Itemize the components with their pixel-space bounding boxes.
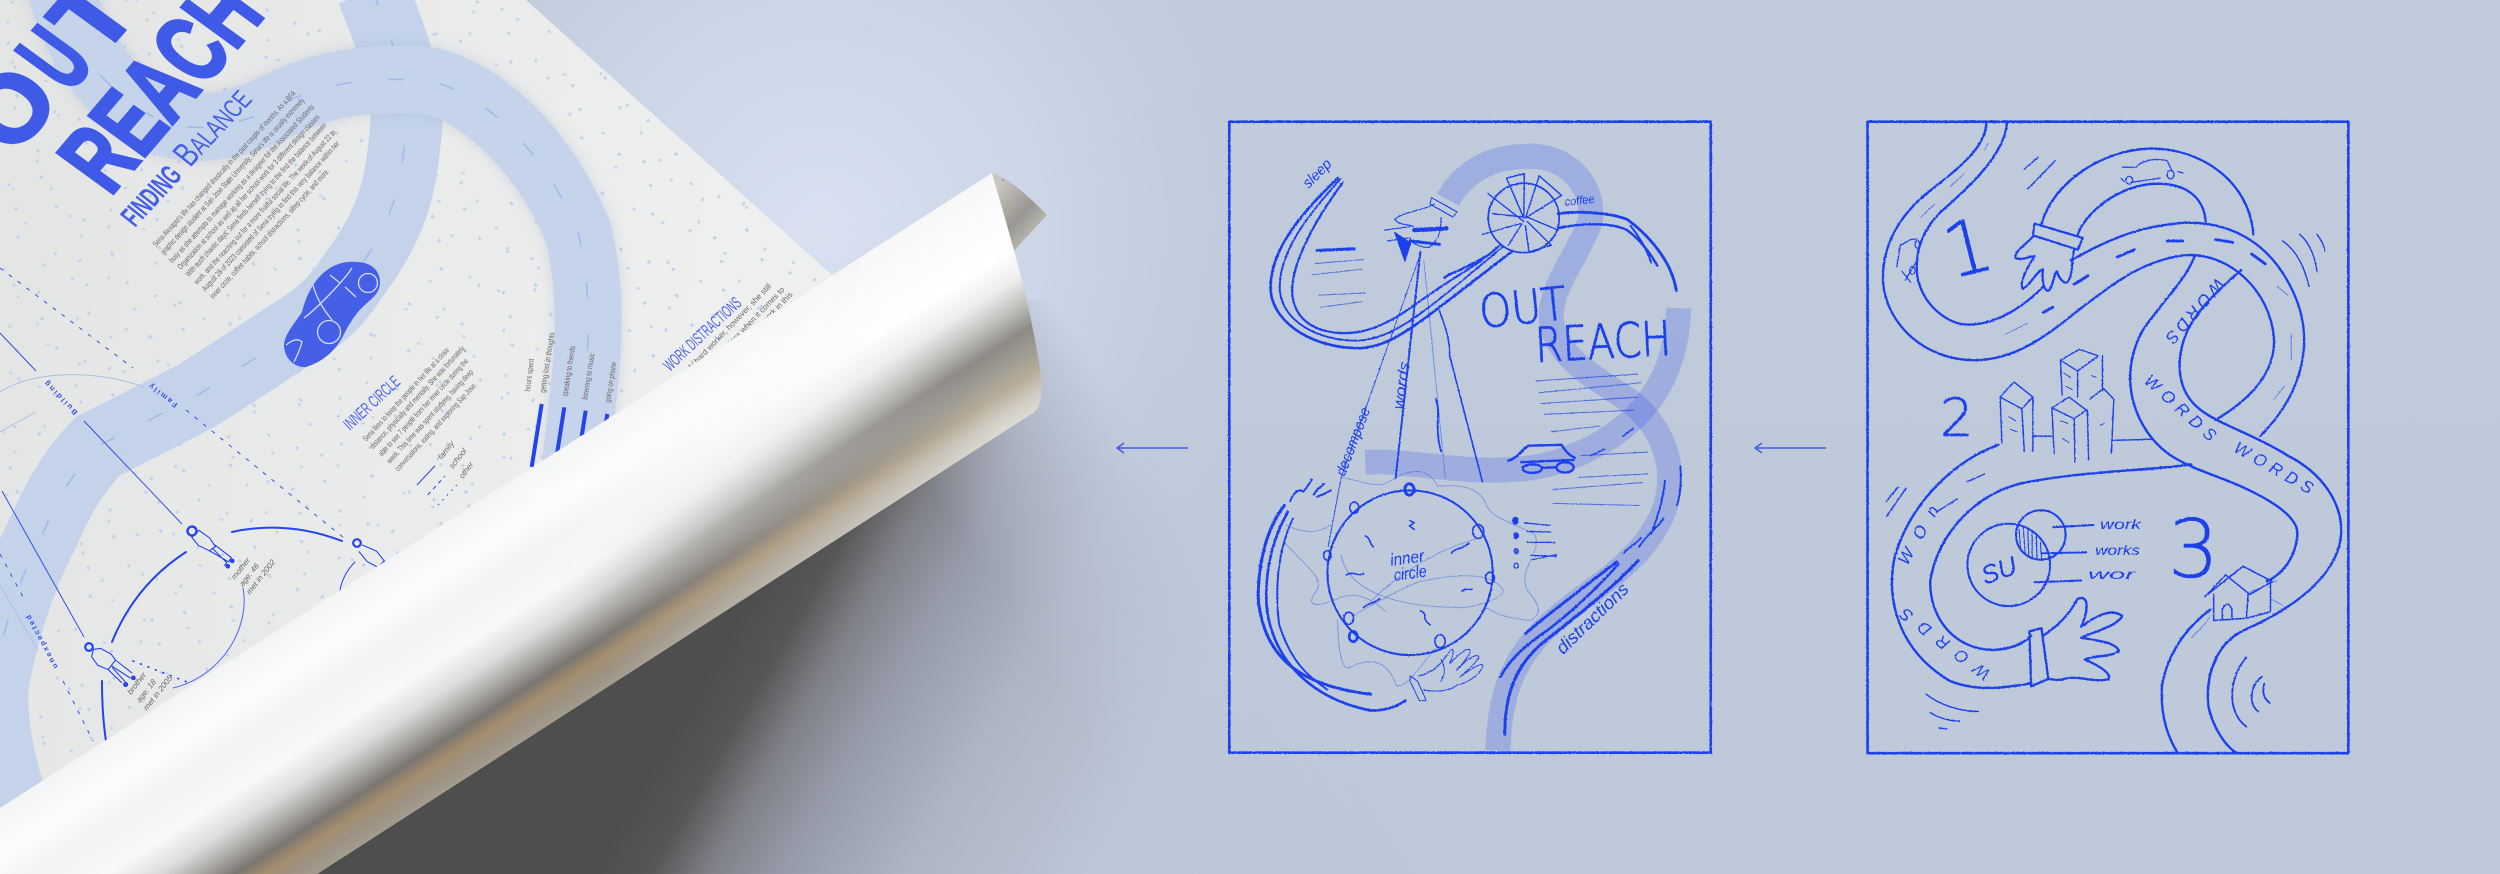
squiggle above left road <box>1290 479 1331 501</box>
label: brother: brother <box>125 670 148 696</box>
bar chart: hours spent: hours spent <box>523 357 536 392</box>
icon: top hand with pencils <box>1384 198 1457 261</box>
sketch linework <box>1229 122 1711 753</box>
venn labels: wor <box>2088 566 2138 582</box>
label: brother: met in 2005 <box>141 673 175 712</box>
icon: car on road <box>284 262 380 367</box>
coffee road <box>1558 212 1676 291</box>
connector lines and labels: Family <box>146 380 179 410</box>
label: distractions: distractions <box>1552 579 1633 658</box>
road one edges <box>1883 122 2304 436</box>
legend: family <box>436 438 457 461</box>
number 1: 1 <box>1934 200 2002 296</box>
poster paper <box>0 0 832 810</box>
arrow: thumbnail to sketch <box>1755 443 1826 453</box>
road words: WORDS <box>2140 371 2220 446</box>
inner circle paragraph: conversations, eating, and exploring San Jose. <box>393 381 479 473</box>
road words <box>1894 274 2317 684</box>
road dashes <box>1591 428 1633 456</box>
road lower loop <box>0 0 406 850</box>
road words: WOn <box>1894 502 1943 568</box>
icon: sketch car <box>1508 445 1575 473</box>
sketch title: OUT: OUT <box>1477 276 1569 339</box>
panel: refined sketch <box>1229 122 1711 753</box>
intro paragraph <box>151 89 342 301</box>
legend: school <box>447 447 469 471</box>
number 2: 2 <box>1940 388 1974 449</box>
panel: thumbnail sketch <box>1868 122 2348 753</box>
inner circle paragraph: able to see 7 people from her inner circle during the <box>377 356 470 458</box>
sketch title: REACH: REACH <box>1534 311 1672 374</box>
intro paragraph: With such chaotic days, Sena finds herself trying to the find the balance between <box>184 121 328 279</box>
subtitle: BALANCE <box>165 80 259 173</box>
label: inner circle: inner <box>1389 546 1426 570</box>
bar chart: hours spent: going on phone <box>603 361 618 403</box>
label: brother: age: 18 <box>134 677 158 704</box>
hatch marks by title <box>1536 374 1648 506</box>
label: inner circle <box>1389 546 1428 585</box>
inner circle heading: INNER CIRCLE <box>340 372 404 434</box>
words road edges <box>2130 256 2341 753</box>
icon: small cars <box>1897 160 2183 282</box>
lower road edges <box>1892 445 2191 688</box>
legend <box>417 438 476 505</box>
label: coffee: coffee <box>1564 192 1595 209</box>
arm road <box>2041 149 2253 234</box>
subtitle: FINDING <box>115 160 189 232</box>
venn diagram <box>1967 510 2093 606</box>
inner circle paragraph: distance, physically and mentally. She was fortunately <box>368 344 466 451</box>
connector lines and labels: Building <box>41 378 79 417</box>
road words: WORDS <box>1896 603 1994 684</box>
string lines <box>1328 252 1486 547</box>
road dashes <box>1921 143 2291 399</box>
work distractions paragraph: Sena is an extremely hard worker, however, she still <box>639 282 773 421</box>
legend: other <box>457 460 476 480</box>
figure: brother <box>84 642 136 688</box>
icon: house <box>2191 566 2283 638</box>
sketch road wash <box>1365 156 1679 751</box>
icon: upper hand <box>2015 224 2083 291</box>
inner circle paragraph: Sena likes to keep the people in her life at a close <box>361 345 451 443</box>
cast shadow of the curl <box>317 300 1129 874</box>
figure: third person <box>352 538 386 567</box>
inner circle drawing <box>1324 484 1494 655</box>
number 3: 3 <box>2168 503 2219 596</box>
work distractions paragraph: struggles with distractions when it comes to <box>673 285 787 402</box>
arrow: sketch to poster <box>1117 443 1188 453</box>
label: sleep: sleep <box>1299 156 1335 192</box>
venn labels: work <box>2100 516 2142 532</box>
curl: rolled paper band <box>0 173 1042 874</box>
label: inner circle: circle <box>1393 562 1428 585</box>
intro paragraph: Sena Alexapto's life has changed drastically in the past couple of months. As a BFA <box>151 89 298 249</box>
icon: lower hand <box>2029 598 2122 686</box>
road upper sweep <box>60 0 588 470</box>
venn labels <box>2088 516 2142 582</box>
subtitle <box>120 90 253 228</box>
label: brother <box>127 672 172 711</box>
connector lines and labels: unexpected <box>23 612 60 670</box>
label: mother: met in 2002 <box>244 557 278 596</box>
thin wandering lines <box>1284 471 1538 686</box>
city buildings <box>2000 349 2153 462</box>
left lower road <box>1258 506 1405 710</box>
work distractions paragraph <box>686 283 792 368</box>
coffee pie <box>1482 174 1562 253</box>
label: decompose: decompose <box>1332 405 1374 478</box>
intro paragraph: Organization at school as well as all her school work for 3 different design classes. <box>176 112 322 271</box>
venn initials: SU <box>1977 550 2021 591</box>
icon: bottom hand <box>1410 649 1483 701</box>
intro paragraph: August 28 of 2023 consisted of Sena trying to find this very balance within her <box>200 139 342 293</box>
dots with lines <box>1513 517 1556 568</box>
intro paragraph: inner circle, coffee habits, school distractions, sleep cycle, and more. <box>208 167 331 301</box>
connector lines and labels <box>0 268 344 741</box>
venn labels: works <box>2095 542 2140 558</box>
bar chart: hours spent <box>523 332 618 467</box>
bar chart: hours spent: listening to music <box>580 352 597 400</box>
curl: underside fold <box>992 173 1047 253</box>
sketch frame <box>1229 122 1711 753</box>
background <box>596 0 1100 364</box>
bar chart: hours spent: getting lost in thoughts <box>538 332 557 393</box>
work distractions heading: WORK DISTRACTIONS <box>660 294 745 375</box>
motion marks <box>1886 157 2325 729</box>
inner circle network <box>80 524 397 741</box>
thumbnail linework <box>1868 122 2348 753</box>
label: mother <box>232 558 276 595</box>
intro paragraph: graphic design student at San Jose State University, Sena's life is usually extremely <box>159 96 306 256</box>
road shadow <box>60 0 588 470</box>
poster <box>0 0 832 850</box>
intro paragraph: busy as she attempts to manage working as a designer for the Associated Students <box>167 103 316 265</box>
intro paragraph: work, and the reaching out for a more fruitful social life. The week of August 22 to <box>192 128 338 287</box>
hatch marks upper left <box>1312 249 1365 307</box>
figure: mother <box>186 525 235 568</box>
bar chart: hours spent: speaking to friends <box>560 345 577 397</box>
paper speckles <box>0 0 832 810</box>
work distractions paragraph: focusing on her school work in this <box>703 290 794 384</box>
thumbnail frame <box>1868 122 2348 753</box>
road words: WORDS <box>2231 438 2317 498</box>
distractions road <box>1500 466 1681 734</box>
sleep road <box>1271 178 1512 348</box>
label: words: words <box>1390 360 1414 411</box>
road words: WORDS <box>2161 274 2228 348</box>
label: mother: mother <box>229 556 252 581</box>
label: mother: age: 46 <box>237 561 261 588</box>
inner circle paragraph: week. This time was spent studying, having deep <box>384 367 475 466</box>
inner circle paragraph <box>361 344 479 473</box>
